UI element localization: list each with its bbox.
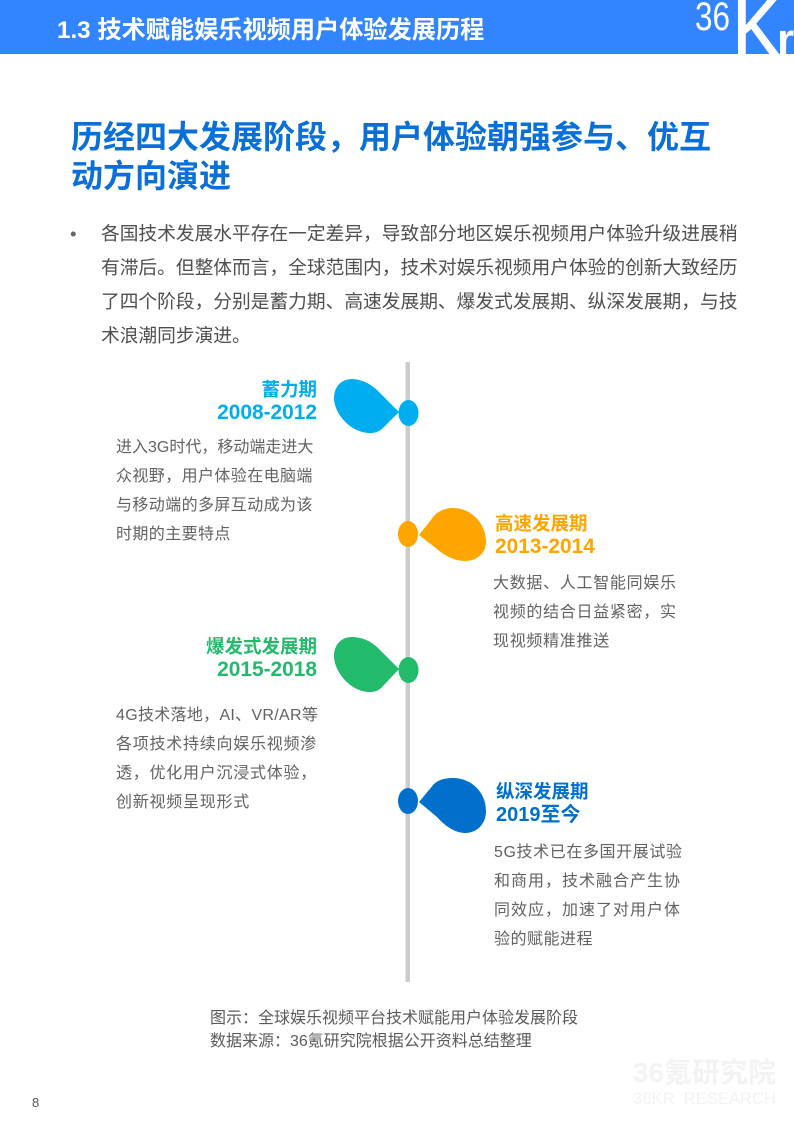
marker: 2008-2012	[334, 379, 418, 433]
watermark	[633, 1057, 776, 1108]
caption and source: 图示：全球娱乐视频平台技术赋能用户体验发展阶段	[210, 1010, 578, 1027]
stage 3 heading: 2015-2018	[217, 658, 317, 681]
stage 1 description: 与移动端的多屏互动成为该	[116, 497, 313, 514]
stage 2 description	[493, 574, 677, 650]
stage 2 heading: 2013-2014	[495, 535, 595, 558]
stage 3 heading	[206, 636, 317, 681]
stage 4 description: 和商用，技术融合产生协	[494, 873, 681, 890]
stage 4 description: 同效应，加速了对用户体	[494, 902, 681, 919]
stage 2 description: 大数据、人工智能同娱乐	[493, 575, 677, 592]
stage 2 heading	[495, 513, 595, 558]
stage 3 description: 创新视频呈现形式	[116, 794, 250, 811]
marker: 2019至今	[398, 778, 486, 833]
stage 1 heading: 2008-2012	[217, 401, 317, 424]
caption and source	[210, 1009, 578, 1050]
stage 3 description: 各项技术持续向娱乐视频渗	[116, 736, 317, 753]
header bar	[0, 0, 794, 54]
intro bullet paragraph: •	[70, 223, 77, 244]
stage 4 heading	[496, 781, 589, 826]
stage 1 description: 众视野，用户体验在电脑端	[116, 468, 313, 485]
intro bullet paragraph	[70, 223, 737, 346]
intro bullet paragraph: 有滞后。但整体而言，全球范围内，技术对娱乐视频用户体验的创新大致经历	[101, 257, 737, 278]
stage 3 description: 4G技术落地，AI、VR/AR等	[116, 707, 318, 724]
stage 1 description: 时期的主要特点	[116, 526, 231, 543]
main heading: 历经四大发展阶段，用户体验朝强参与、优互	[71, 119, 711, 155]
stage 3 heading: 爆发式发展期	[206, 636, 317, 657]
intro bullet paragraph: 了四个阶段，分别是蓄力期、高速发展期、爆发式发展期、纵深发展期，与技	[101, 291, 737, 312]
main heading	[71, 119, 711, 194]
stage 3 description: 透，优化用户沉浸式体验，	[116, 765, 317, 782]
stage 4 description	[494, 843, 683, 948]
logo: 36Kr	[695, 0, 794, 54]
main heading: 动方向演进	[71, 158, 231, 194]
caption and source: 数据来源：36氪研究院根据公开资料总结整理	[210, 1033, 532, 1050]
stage 4 heading: 2019至今	[496, 804, 580, 826]
timeline axis	[406, 362, 410, 982]
stage 4 description: 验的赋能进程	[494, 931, 593, 948]
intro bullet paragraph: 各国技术发展水平存在一定差异，导致部分地区娱乐视频用户体验升级进展稍	[101, 223, 737, 244]
marker: 2013-2014	[398, 508, 486, 561]
stage 1 heading: 蓄力期	[261, 379, 317, 400]
stage 4 heading: 纵深发展期	[496, 781, 589, 802]
stage 3 description	[116, 706, 318, 811]
stage 2 description: 现视频精准推送	[493, 633, 610, 650]
stage 4 description: 5G技术已在多国开展试验	[494, 844, 683, 861]
watermark: 36KR RESEARCH	[633, 1089, 776, 1108]
watermark: 36氪研究院	[633, 1057, 776, 1088]
stage 2 description: 视频的结合日益紧密，实	[493, 604, 677, 621]
stage 1 heading	[217, 379, 317, 424]
marker: 2015-2018	[334, 637, 418, 692]
intro bullet paragraph: 术浪潮同步演进。	[101, 325, 251, 346]
timeline chart	[334, 362, 486, 982]
stage 2 heading: 高速发展期	[495, 513, 588, 534]
stage 1 description: 进入3G时代，移动端走进大	[116, 439, 313, 456]
page number: 8	[32, 1095, 39, 1110]
stage 1 description	[116, 438, 313, 543]
header title: 1.3 技术赋能娱乐视频用户体验发展历程	[57, 17, 484, 44]
